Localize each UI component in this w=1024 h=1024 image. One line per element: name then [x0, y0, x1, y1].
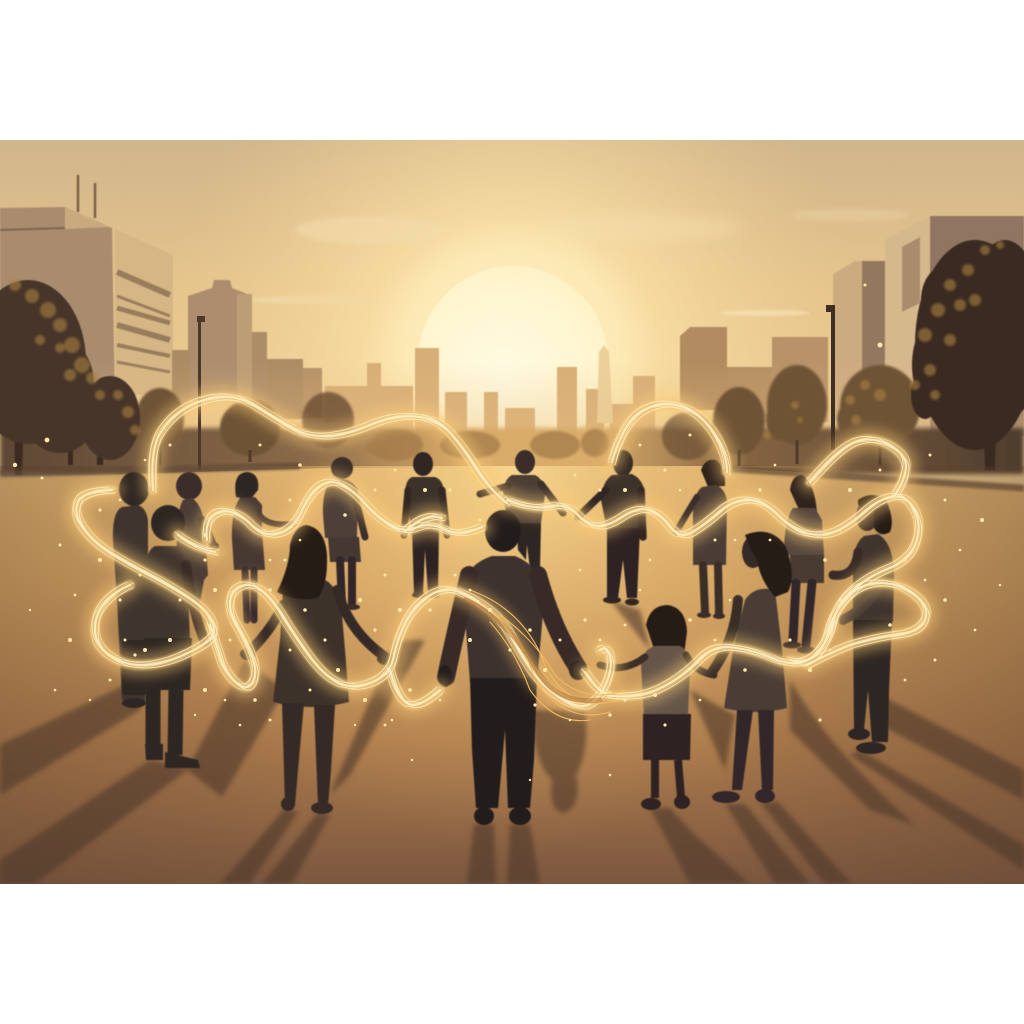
sky [0, 140, 1024, 510]
figure: man with arms down [404, 452, 447, 598]
figure: man in shorts [323, 457, 365, 610]
ribbon glow [76, 397, 926, 706]
figure: front left man [143, 505, 205, 768]
figure: man facing left [578, 450, 645, 606]
haze over skyline [172, 376, 1024, 436]
figure: man at left [175, 472, 220, 604]
figure: centre man seen from behind [438, 510, 587, 825]
tree line [0, 305, 1024, 474]
ribbon body [76, 397, 926, 706]
large trees [0, 240, 1024, 475]
ribbon highlight strands [72, 394, 930, 709]
figure: woman with long hair and dress [240, 525, 395, 814]
distant skyline [325, 345, 655, 439]
figure: woman in dress on right [712, 532, 792, 803]
tree bokeh leaves [9, 241, 1004, 439]
foreground figures [143, 495, 894, 825]
figure: person on far right [833, 495, 894, 754]
background figures [113, 450, 824, 708]
dark copper strands at centre [465, 600, 600, 701]
sparkle particles [13, 284, 1001, 781]
illustration: people in a circle at sunset [0, 140, 1024, 884]
right buildings [680, 216, 1024, 436]
sun [392, 239, 634, 429]
figure: far-left man [113, 472, 149, 708]
figure: woman with hair [676, 460, 727, 619]
lamp post left [197, 316, 205, 470]
figure: woman in dress [232, 472, 293, 620]
plaza ground [0, 466, 1024, 884]
figure: child [600, 605, 714, 810]
lamp post right [826, 305, 835, 450]
figure: man reaching out [480, 450, 563, 569]
light ribbons [72, 394, 930, 721]
figure: woman facing right rear [783, 475, 824, 654]
left buildings [0, 175, 322, 419]
centre ribbon fan of thin strands [470, 590, 625, 721]
long shadows [0, 600, 1024, 884]
